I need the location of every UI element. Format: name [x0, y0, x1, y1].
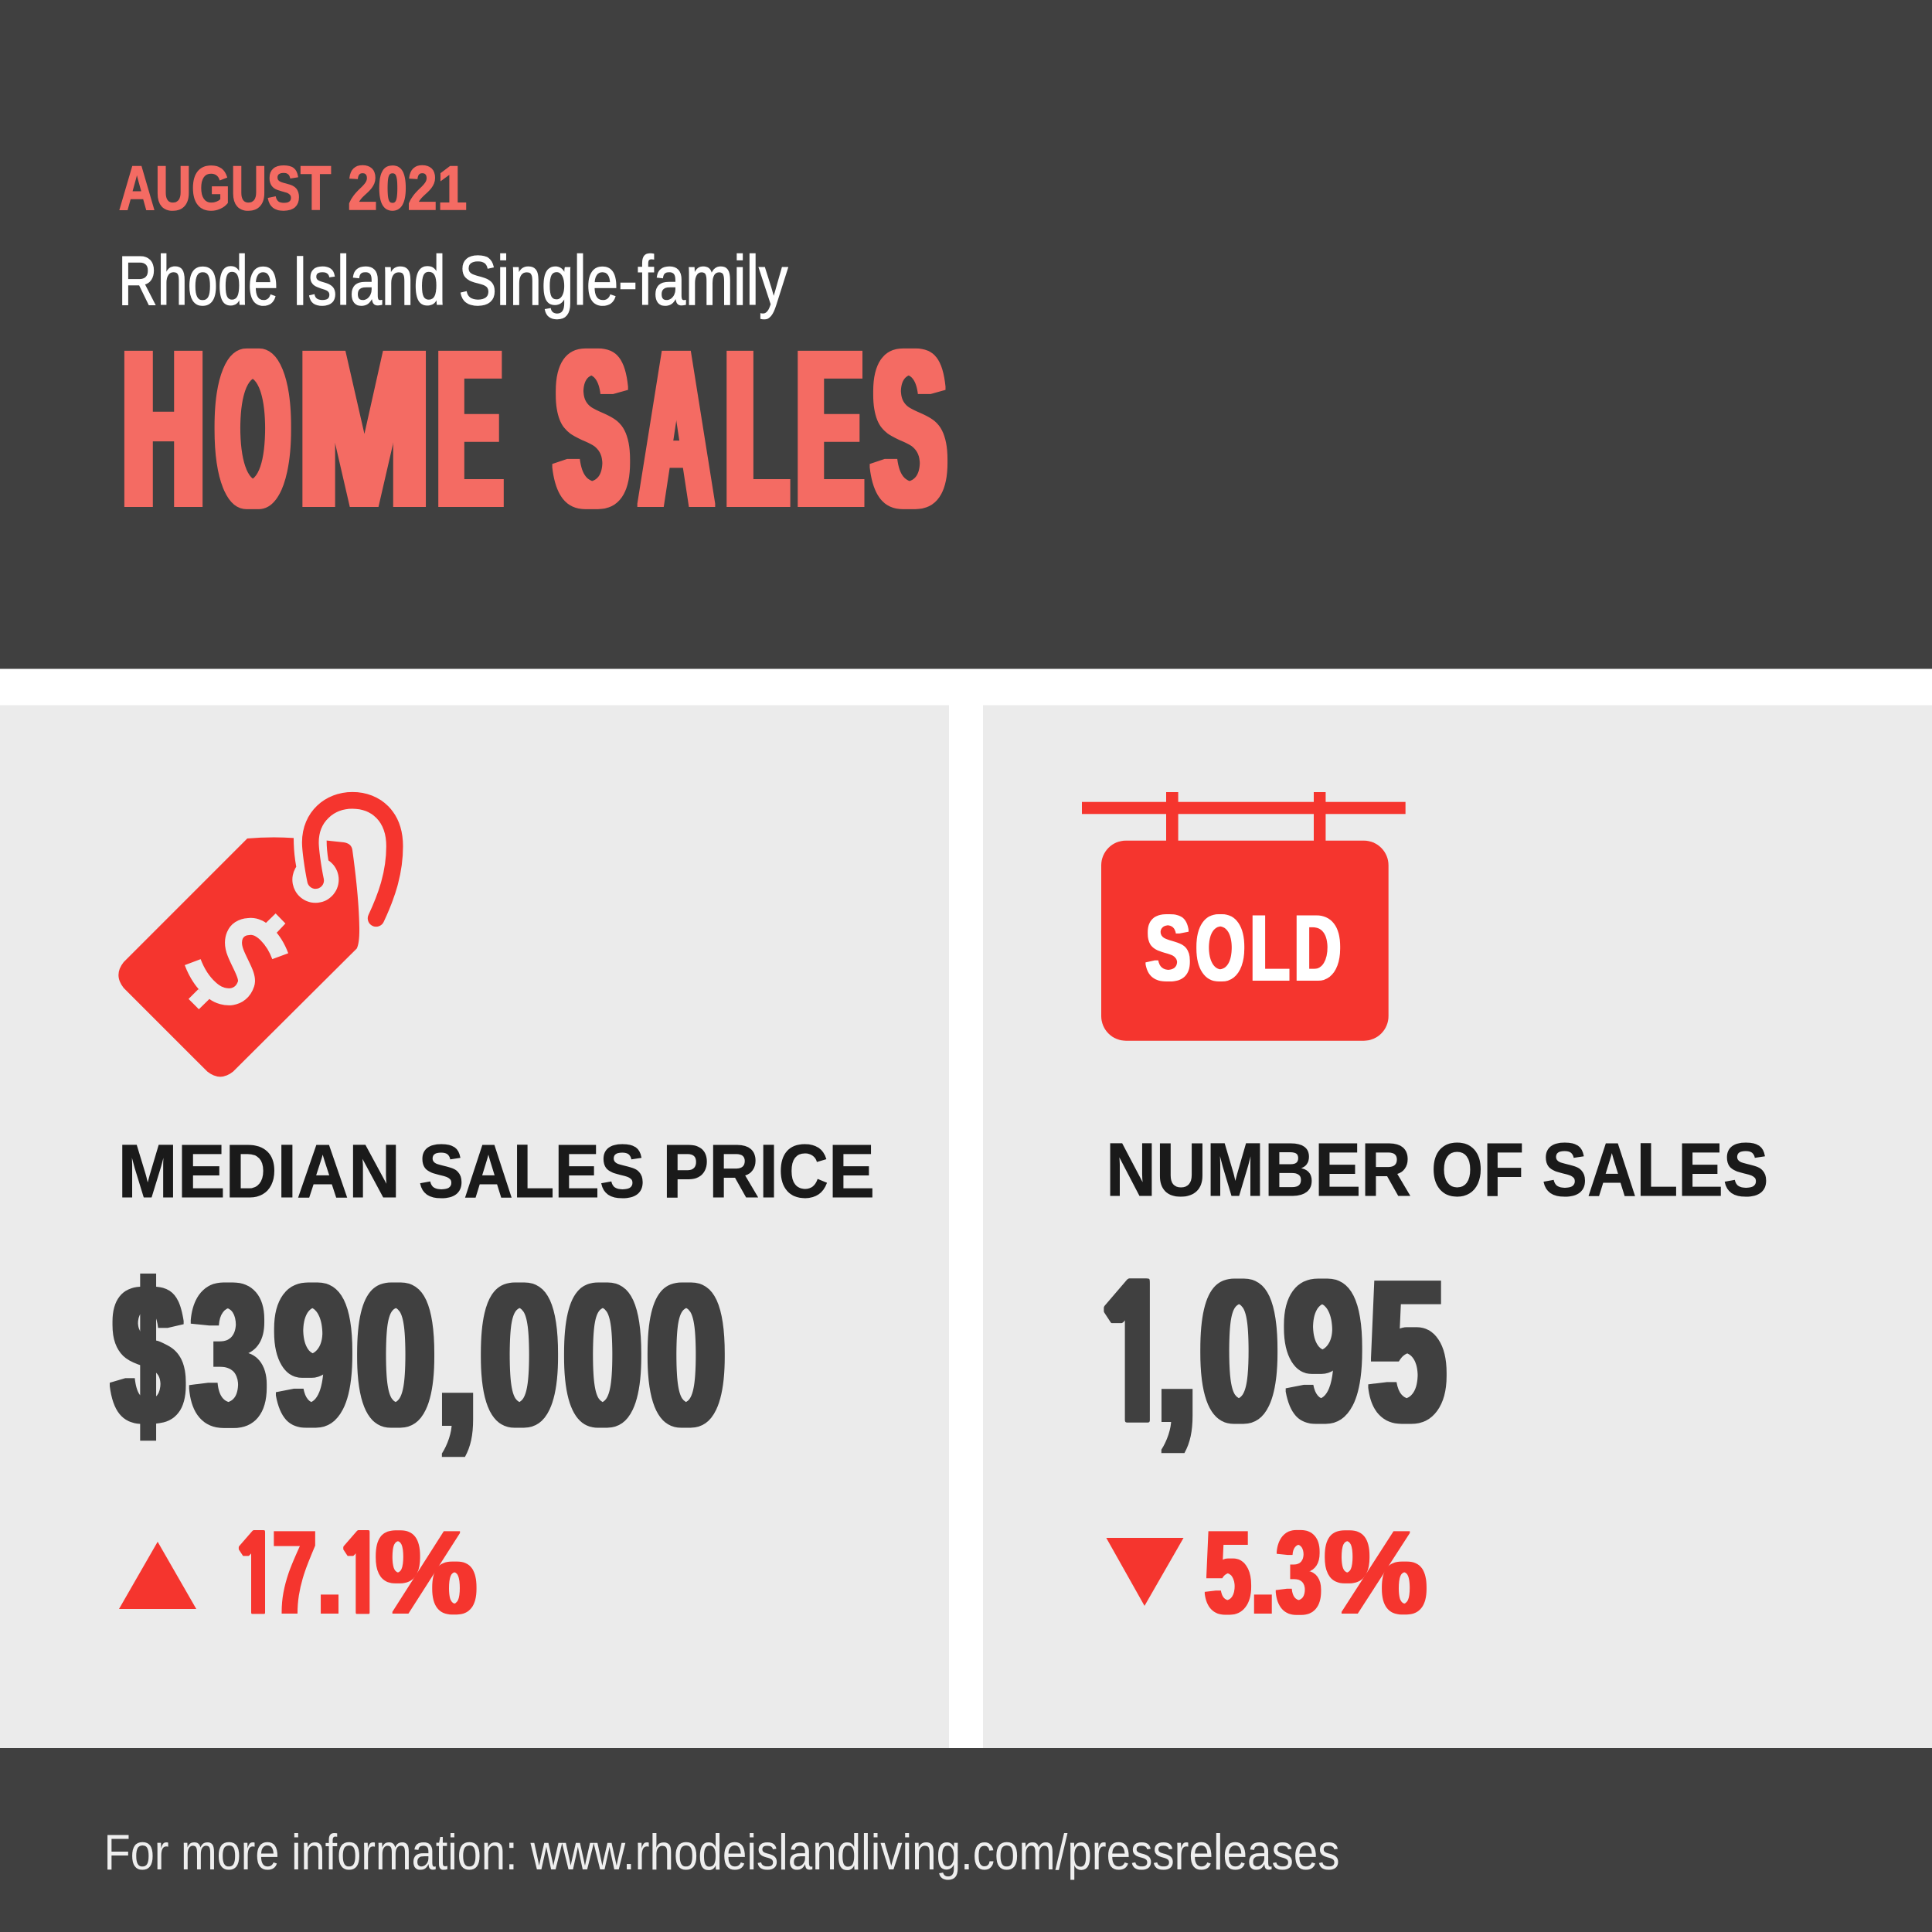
change: number of sales: 3 [1276, 1507, 1321, 1638]
subtitle: Island [292, 243, 446, 320]
value: number of sales: , [1155, 1240, 1199, 1464]
date heading: 2021 [348, 154, 467, 223]
title: S [555, 304, 628, 553]
value: median price: 3 [191, 1243, 267, 1468]
icon: sold sign: D [1294, 896, 1342, 1000]
panel: header [0, 0, 1932, 669]
icon: down arrow [1107, 1538, 1184, 1606]
label: number of sales: NUMBER [1106, 1128, 1411, 1212]
value: median price: 0 [563, 1243, 642, 1468]
date heading: AUGUST [119, 154, 332, 223]
value: number of sales: 0 [1199, 1240, 1279, 1464]
label: median sales price: PRICE [662, 1129, 875, 1213]
value: number of sales: 9 [1284, 1240, 1363, 1464]
value: number of sales: 5 [1369, 1240, 1446, 1464]
change: number of sales: . [1250, 1507, 1276, 1638]
change: median price: . [317, 1507, 342, 1638]
icon: sold sign: O [1196, 896, 1246, 1000]
icon: up arrow [119, 1542, 196, 1609]
label: median sales price: MEDIAN [117, 1129, 400, 1213]
footer text: For more information: [104, 1824, 518, 1880]
title: E [438, 304, 502, 553]
label: number of sales: OF [1431, 1128, 1524, 1212]
change: median price: 1 [335, 1522, 387, 1629]
value: median price: 0 [647, 1243, 726, 1468]
value: median price: 0 [356, 1243, 436, 1468]
title: E [798, 304, 862, 553]
subtitle: Rhode [118, 243, 278, 320]
panel: footer [0, 1748, 1932, 1932]
title: M [298, 304, 430, 553]
value: median price: 0 [480, 1243, 560, 1468]
icon: sold sign: L [1250, 896, 1290, 1000]
title: L [726, 304, 787, 553]
subtitle: Single-family [458, 243, 787, 320]
panel: number of sales [983, 705, 1932, 1748]
label: number of sales: SALES [1542, 1128, 1768, 1212]
icon: price tag [118, 801, 395, 1077]
title: O [217, 304, 289, 553]
change: median price: % [376, 1507, 478, 1638]
change: median price: 7 [273, 1507, 316, 1638]
panel: median sales price [0, 705, 949, 1748]
change: median price: 1 [230, 1522, 283, 1629]
footer text: www.rhodeislandliving.com/pressreleases [530, 1824, 1340, 1880]
label: median sales price: SALES [419, 1129, 645, 1213]
value: median price: , [436, 1243, 479, 1468]
panel: header: S [872, 304, 946, 553]
change: number of sales: % [1325, 1507, 1427, 1638]
title: H [123, 304, 204, 553]
value: median price: $ [113, 1243, 183, 1468]
icon: sold sign: S [1145, 896, 1191, 1000]
value: median price: 9 [274, 1243, 353, 1468]
title: A [641, 304, 712, 553]
icon: sold sign [1082, 792, 1406, 1041]
value: number of sales: 1 [1090, 1264, 1179, 1448]
change: number of sales: 5 [1204, 1507, 1251, 1638]
